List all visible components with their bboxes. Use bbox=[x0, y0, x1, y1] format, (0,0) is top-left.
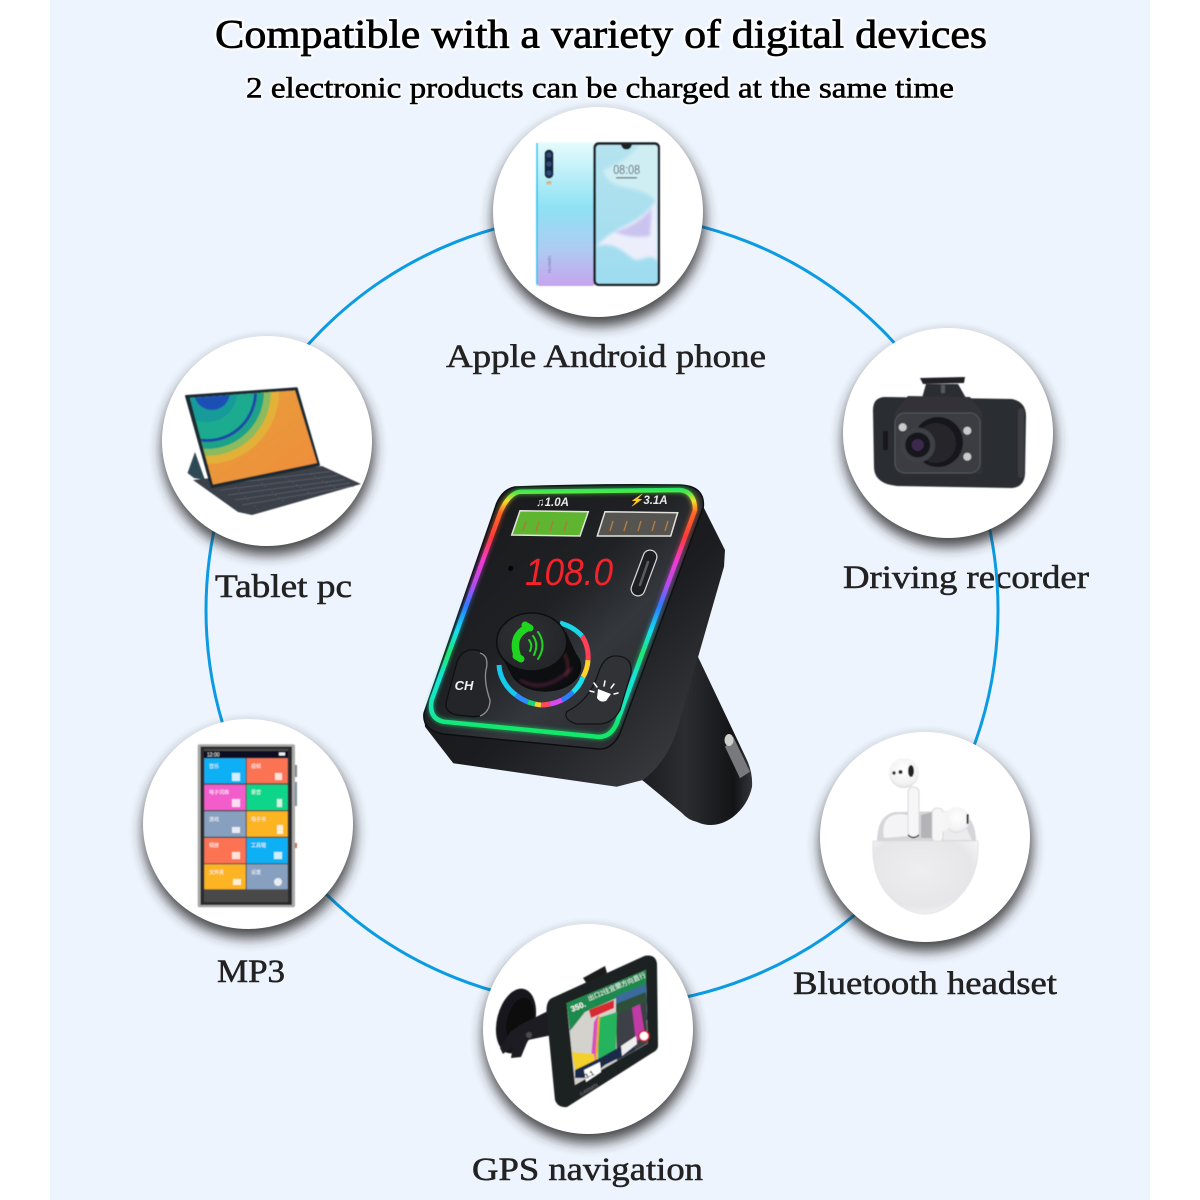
light button bbox=[566, 656, 631, 724]
car FM transmitter bbox=[424, 485, 752, 825]
port labels bbox=[536, 493, 668, 509]
icon: GPS unit with suction mount bbox=[490, 955, 658, 1107]
icon: tablet with keyboard bbox=[184, 386, 362, 516]
label: MP3: MP3 bbox=[217, 954, 285, 990]
icon: smartphone bbox=[536, 142, 660, 286]
icon: green phone with signal waves bbox=[515, 625, 542, 659]
device disc: phone bbox=[493, 107, 705, 326]
connecting ring bbox=[206, 214, 998, 1006]
icon: MP3 player: 相册 bbox=[209, 842, 219, 849]
device disc: driving recorder bbox=[843, 328, 1055, 547]
CH button bbox=[446, 650, 490, 717]
icon: GPS unit with suction mount: 3.1 bbox=[584, 1070, 596, 1081]
subtitle: 2 electronic products can be charged at the same time bbox=[246, 72, 954, 105]
USB port: green bbox=[512, 511, 588, 536]
USB port: grey bbox=[597, 512, 678, 536]
icon: MP3 player: 工具箱 bbox=[251, 842, 266, 849]
label: Apple Android phone: Apple Android phone bbox=[446, 339, 766, 375]
subtitle: 2 electronic products can be charged at the same time bbox=[246, 72, 954, 105]
title: Compatible with a variety of digital devices bbox=[215, 12, 987, 57]
label: Bluetooth headset: Bluetooth headset bbox=[793, 966, 1057, 1002]
icon: GPS unit with suction mount: GARMIN bbox=[579, 1082, 600, 1098]
icon: GPS unit with suction mount: 350. bbox=[569, 1000, 587, 1014]
device disc: tablet bbox=[135, 320, 374, 555]
charger plug bbox=[630, 640, 752, 825]
icon: MP3 player: 电子词典 bbox=[209, 789, 229, 796]
icon: MP3 player: 文件夹 bbox=[209, 869, 224, 876]
FM frequency display: 108.0 bbox=[525, 552, 613, 594]
LED ring glow bbox=[431, 490, 695, 737]
icon: MP3 player: 设置 bbox=[251, 869, 261, 876]
icon: MP3 player: 12:00 bbox=[207, 752, 220, 758]
volume knob bbox=[497, 613, 581, 692]
device disc: MP3 player bbox=[143, 719, 355, 938]
title: Compatible with a variety of digital devices bbox=[215, 12, 987, 57]
icon: MP3 player: 音乐 bbox=[209, 763, 219, 770]
icon: dash camera bbox=[873, 377, 1026, 488]
icon: MP3 player: 录音 bbox=[251, 789, 261, 796]
icon: MP3 player: 视频 bbox=[251, 763, 261, 770]
icon: smartphone: HUAWEI bbox=[547, 256, 552, 273]
CH button: CH bbox=[455, 678, 474, 693]
port labels: ⚡3.1A bbox=[629, 493, 668, 507]
icon: smartphone: 08:08 bbox=[613, 162, 640, 177]
microphone hole bbox=[508, 566, 513, 571]
icon: MP3 player: 游戏 bbox=[209, 816, 219, 823]
icon: earbuds in case bbox=[873, 758, 978, 914]
body sides bbox=[424, 507, 725, 787]
icon: MP3 player: 电子书 bbox=[251, 816, 266, 823]
icon: MP3 player bbox=[198, 744, 297, 907]
port labels: ♫1.0A bbox=[536, 497, 569, 509]
LED ring bbox=[431, 490, 695, 737]
device disc: Bluetooth headset bbox=[820, 732, 1032, 951]
front face bbox=[424, 485, 703, 749]
knob LED ring bbox=[499, 623, 588, 705]
icon: GPS unit with suction mount: 出口2往宜蘭方向直行 bbox=[586, 970, 647, 1003]
USB-C port bbox=[638, 557, 650, 589]
device disc: GPS navigation bbox=[483, 924, 695, 1143]
label: Driving recorder: Driving recorder bbox=[843, 560, 1089, 596]
label: Tablet pc: Tablet pc bbox=[215, 569, 352, 605]
label: GPS navigation: GPS navigation bbox=[472, 1152, 703, 1188]
